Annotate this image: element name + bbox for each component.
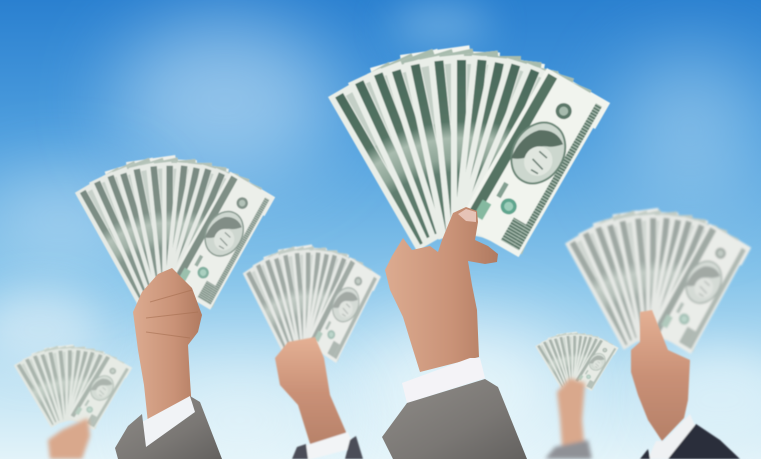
hand: main: [385, 207, 498, 372]
hand and sleeve: left: [115, 268, 222, 459]
hand: far left: [48, 418, 90, 459]
sleeve: main: [382, 379, 527, 459]
money fan: main: [328, 45, 610, 257]
hand and sleeve: right: [631, 310, 740, 459]
money fan: right: [565, 208, 751, 354]
hand and sleeve: main: [382, 207, 527, 459]
hand and sleeve: middle: [275, 337, 363, 459]
money fan: far right: [535, 332, 619, 391]
money fan: middle: [243, 244, 381, 363]
thumbnail: [458, 209, 476, 222]
money fan: left: [75, 155, 275, 310]
cuff: main: [402, 358, 485, 403]
hand: far right: [545, 378, 592, 459]
money fan: far left: [14, 344, 132, 430]
